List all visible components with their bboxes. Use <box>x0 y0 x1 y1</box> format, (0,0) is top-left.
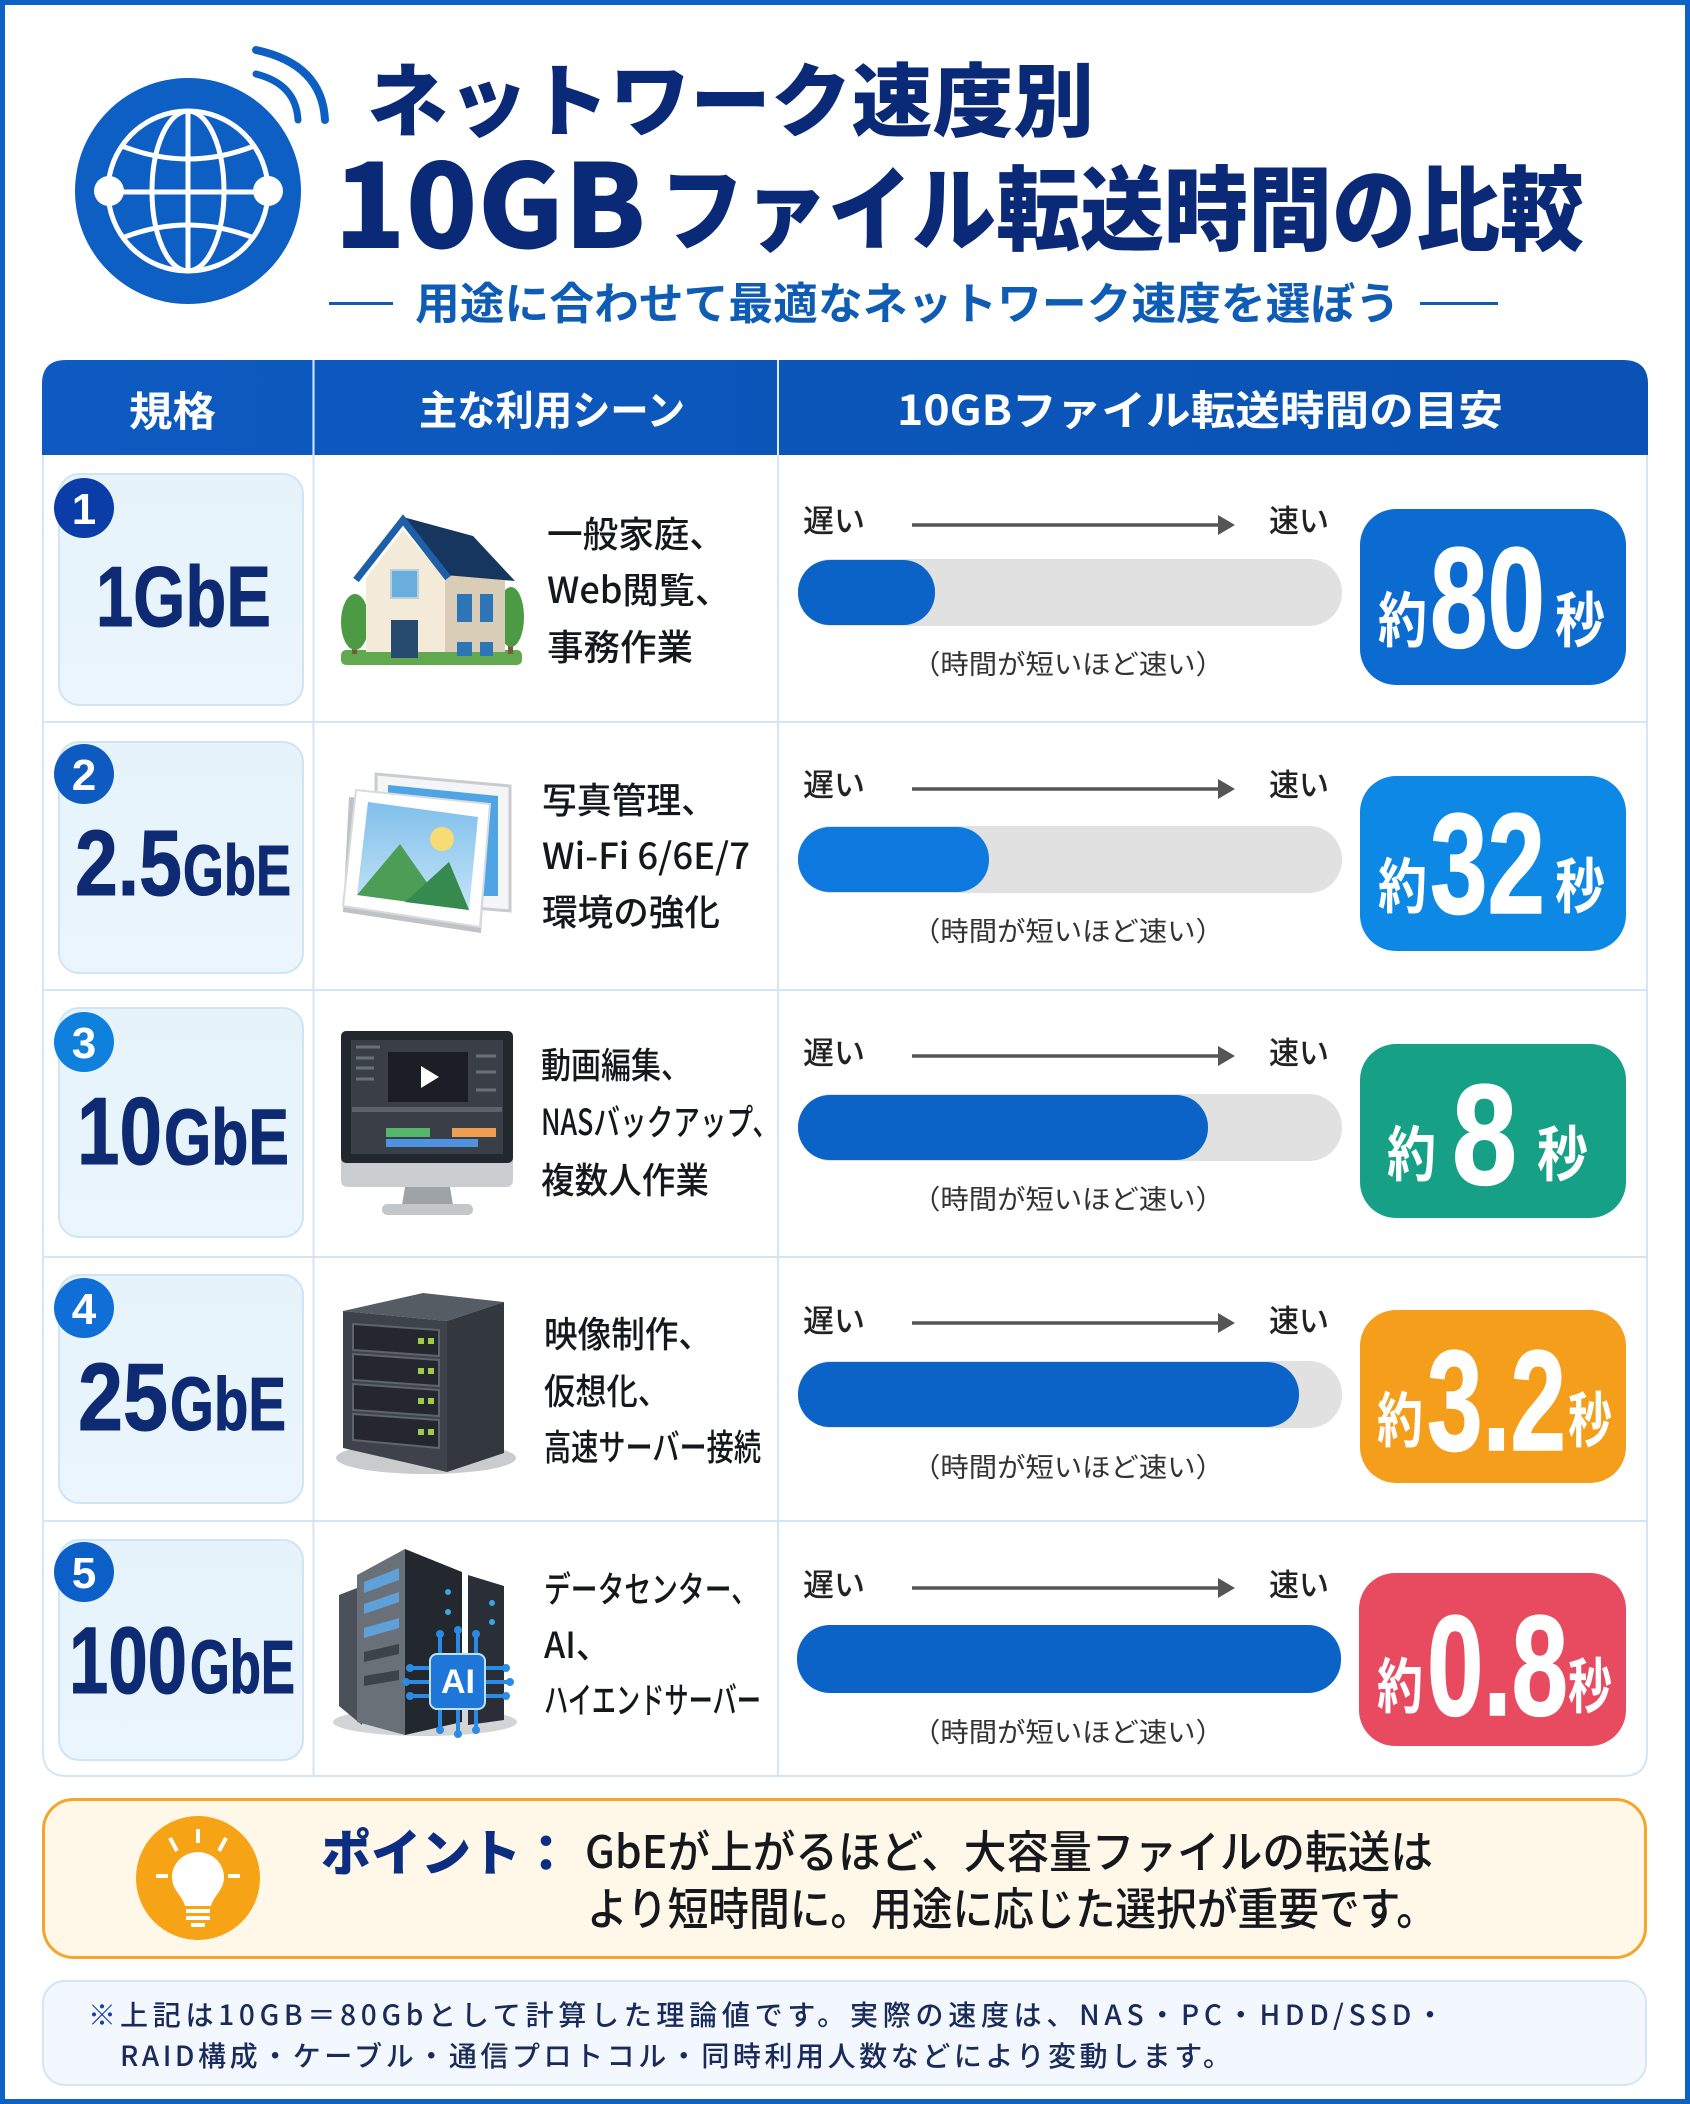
spec card 10GbE <box>54 1008 303 1237</box>
callout: point: より短時間に。用途に応じた選択が重要です。 <box>587 1873 1437 1938</box>
speed bar 3: 遅い <box>803 1028 865 1073</box>
speed bar 5: 遅い <box>803 1560 865 1605</box>
table grid <box>43 455 1647 1776</box>
footnote: RAID構成・ケーブル・通信プロトコル・同時利用人数などにより変動します。 <box>120 2035 1231 2075</box>
speed bar 4: 遅い <box>803 1296 865 1341</box>
value 約8秒: 約 <box>1387 1107 1436 1194</box>
spec card 25GbE: GbE <box>170 1362 286 1446</box>
footnote: 上記は10GB＝80Gbとして計算した理論値です。実際の速度は、NAS・PC・HDD/SSD・ <box>120 1994 1444 2034</box>
icon: house <box>341 517 524 665</box>
icon: data center with AI chip: AI <box>441 1663 475 1701</box>
use text 5: データセンター、 <box>544 1561 758 1613</box>
speed bar 3: （時間が短いほど速い） <box>912 1178 1224 1217</box>
use text 3: 動画編集、 <box>541 1037 691 1089</box>
value 約0.8秒: 0.8 <box>1427 1587 1568 1746</box>
value 約8秒: 秒 <box>1537 1107 1588 1194</box>
spec card 25GbE: 25 <box>78 1344 168 1451</box>
title: ファイル転送時間の比較 <box>660 137 1584 270</box>
spec card 2.5GbE: 2.5 <box>75 811 182 915</box>
use text 4: 高速サーバー接続 <box>544 1419 761 1471</box>
use text 3: 複数人作業 <box>541 1152 709 1204</box>
use text 4 <box>544 1306 761 1471</box>
icon: monitor <box>341 1031 513 1215</box>
use text 2: Wi-Fi 6/6E/7 <box>542 828 750 880</box>
spec card 100GbE: 100 <box>69 1608 187 1714</box>
icon: photos <box>343 774 510 933</box>
use text 4: 仮想化、 <box>544 1363 669 1415</box>
value 約0.8秒 <box>1359 1573 1626 1746</box>
table header: 主な利用シーン <box>419 377 685 437</box>
speed bar 4 <box>798 1296 1342 1485</box>
row 4: 25GbE <box>54 1275 1626 1503</box>
speed bar 1: （時間が短いほど速い） <box>912 643 1224 682</box>
use text 1 <box>547 506 731 671</box>
use text 5: ハイエンドサーバー <box>544 1672 761 1724</box>
table header: 規格 <box>129 378 216 438</box>
spec card 10GbE: GbE <box>164 1092 289 1181</box>
use text 3: NASバックアップ、 <box>541 1094 779 1146</box>
icon: light bulb <box>136 1816 260 1940</box>
speed bar 2 <box>798 760 1342 949</box>
speed bar 2: 遅い <box>803 760 865 805</box>
spec card 1GbE: 1 <box>72 485 96 534</box>
callout: point: GbEが上がるほど、大容量ファイルの転送は <box>585 1816 1433 1881</box>
use text 1: Web閲覧、 <box>547 562 731 614</box>
row 2: 2.5GbE <box>54 742 1626 973</box>
speed bar 4: （時間が短いほど速い） <box>912 1446 1224 1485</box>
speed bar 2: （時間が短いほど速い） <box>912 910 1224 949</box>
spec card 100GbE: GbE <box>190 1625 295 1709</box>
value 約80秒: 80 <box>1430 519 1545 678</box>
value 約8秒 <box>1360 1044 1626 1218</box>
use text 1: 一般家庭、 <box>547 506 725 558</box>
value 約80秒: 約 <box>1378 573 1427 660</box>
callout: point: ポイント： <box>321 1814 571 1886</box>
spec card 10GbE: 10 <box>77 1078 162 1185</box>
spec card 100GbE <box>54 1540 303 1760</box>
spec card 2.5GbE: 2 <box>72 751 96 800</box>
value 約0.8秒: 秒 <box>1568 1639 1612 1726</box>
value 約32秒: 32 <box>1430 785 1545 944</box>
spec card 25GbE: 4 <box>72 1285 97 1334</box>
use text 5: AI、 <box>544 1617 610 1669</box>
value 約3.2秒: 約 <box>1377 1373 1423 1460</box>
value 約80秒: 秒 <box>1555 573 1605 660</box>
row 1: 1GbE <box>54 474 1626 705</box>
speed bar 3 <box>798 1028 1342 1217</box>
value 約0.8秒: 約 <box>1377 1639 1423 1726</box>
value 約32秒: 秒 <box>1555 839 1605 926</box>
spec card 100GbE: 5 <box>72 1549 96 1598</box>
speed bar 3: 速い <box>1269 1028 1329 1073</box>
use text 3 <box>541 1037 779 1204</box>
value 約3.2秒: 3.2 <box>1427 1322 1566 1481</box>
spec card 25GbE <box>54 1275 303 1503</box>
value 約3.2秒 <box>1360 1310 1626 1483</box>
use text 5 <box>544 1561 761 1724</box>
spec card 2.5GbE <box>54 742 303 973</box>
use text 2: 写真管理、 <box>542 772 716 824</box>
row 5: 100GbE <box>54 1540 1626 1760</box>
spec card 1GbE: 1GbE <box>96 550 271 645</box>
table header <box>42 360 1648 455</box>
spec card 10GbE: 3 <box>72 1019 96 1068</box>
speed bar 1: 速い <box>1269 496 1329 541</box>
value 約32秒 <box>1360 776 1626 951</box>
speed bar 4: 速い <box>1269 1296 1329 1341</box>
footnote <box>43 1981 1646 2085</box>
spec card 1GbE <box>54 474 303 705</box>
icon: server <box>336 1293 516 1474</box>
speed bar 1 <box>798 496 1342 682</box>
table header: 10GBファイル転送時間の目安 <box>897 377 1503 437</box>
use text 2: 環境の強化 <box>542 884 720 936</box>
value 約80秒 <box>1360 509 1626 685</box>
icon: data center with AI chip <box>333 1549 517 1738</box>
value 約3.2秒: 秒 <box>1568 1373 1612 1460</box>
callout: point <box>44 1800 1646 1958</box>
speed bar 5 <box>797 1560 1341 1750</box>
speed bar 2: 速い <box>1269 760 1329 805</box>
title <box>334 38 1584 282</box>
value 約8秒: 8 <box>1452 1056 1517 1215</box>
use text 2 <box>542 772 750 936</box>
row 3: 10GbE <box>54 1008 1626 1237</box>
spec card 2.5GbE: GbE <box>183 832 291 911</box>
use text 4: 映像制作、 <box>544 1306 712 1358</box>
footnote: ※ <box>88 1994 116 2034</box>
title: ネットワーク速度別 <box>367 38 1094 154</box>
title: 10GB <box>334 114 646 282</box>
speed bar 5: （時間が短いほど速い） <box>912 1711 1224 1750</box>
use text 1: 事務作業 <box>547 619 693 671</box>
icon: globe with wifi <box>75 50 325 304</box>
speed bar 5: 速い <box>1269 1560 1329 1605</box>
speed bar 1: 遅い <box>803 496 865 541</box>
value 約32秒: 約 <box>1378 839 1427 926</box>
subtitle: 用途に合わせて最適なネットワーク速度を選ぼう <box>415 268 1400 332</box>
